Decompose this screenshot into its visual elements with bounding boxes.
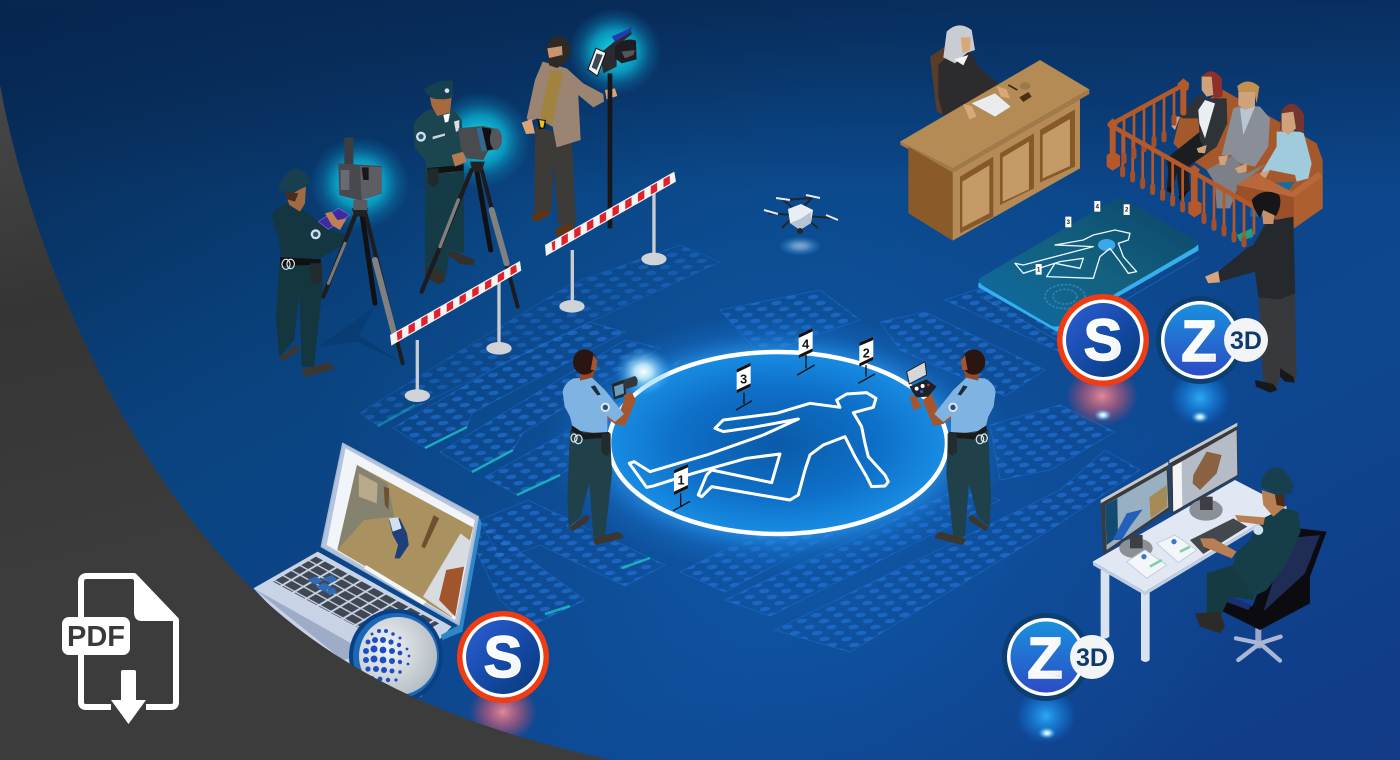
- left monitor: [1101, 462, 1170, 558]
- icon: camera: [612, 376, 638, 407]
- officer with camera: [563, 348, 672, 545]
- legs: [276, 258, 323, 367]
- jury box: [1107, 71, 1323, 245]
- Z3D badge bottom: [1002, 613, 1114, 701]
- evidence marker 3: [736, 363, 752, 410]
- torso: [272, 203, 347, 262]
- man in grey: [1207, 81, 1270, 208]
- officer with tablet and tripod scanner: [272, 137, 410, 377]
- bench armrest: [1237, 172, 1323, 197]
- woman in blue: [1250, 104, 1312, 217]
- S badge bottom left: [457, 611, 549, 703]
- S badge right: S: [1084, 308, 1122, 373]
- tablet with 3D scene: [978, 198, 1199, 340]
- evidence marker 4: [797, 328, 815, 375]
- head: [547, 36, 571, 63]
- screen: [441, 517, 482, 640]
- floor circuit pattern: [360, 245, 1140, 652]
- evidence marker 1: [673, 464, 690, 511]
- small markers: 2: [1125, 208, 1129, 214]
- Z3D badge right: Z: [1181, 309, 1217, 374]
- chalk body outline: [629, 393, 888, 500]
- chair: [1214, 527, 1327, 661]
- Z3D badge bottom: 3D: [1076, 644, 1108, 672]
- small markers: [1036, 201, 1130, 275]
- Z3D badge bottom: Z: [1027, 626, 1063, 691]
- judge bench: [900, 25, 1089, 241]
- keyboard: [1190, 518, 1247, 554]
- detective with handheld scanner pole: [522, 8, 662, 237]
- trousers: [534, 127, 576, 225]
- crime scene circle: [543, 313, 1013, 573]
- evidence marker 1: 1: [677, 474, 685, 488]
- jacket: [527, 62, 604, 147]
- light beam Z badge bottom: [1016, 688, 1076, 744]
- dark corner wedge: [0, 85, 612, 760]
- S badge right: [1057, 294, 1149, 386]
- evidence marker 3: 3: [740, 372, 747, 386]
- globe badge: [349, 609, 443, 703]
- barrier tape front: [390, 261, 521, 402]
- evidence marker 2: 2: [863, 346, 870, 360]
- judge: [930, 25, 998, 117]
- small markers: 1: [1037, 267, 1041, 273]
- papers: [1127, 535, 1197, 578]
- railing: [1110, 83, 1257, 245]
- light beam Z badge right: [1170, 370, 1230, 426]
- tripod: [323, 212, 403, 363]
- small markers: 3: [1067, 220, 1071, 226]
- pole and scanner: [603, 73, 617, 228]
- S badge bottom left: S: [484, 625, 522, 690]
- right monitor: [1169, 423, 1238, 521]
- drone: [764, 195, 838, 256]
- officer with controller: [907, 349, 996, 545]
- tripod: [422, 170, 518, 307]
- officer with laser scanner on tripod: [413, 81, 532, 307]
- seated officer: [1195, 467, 1301, 633]
- Z3D badge right: 3D: [1230, 327, 1262, 355]
- evidence marker 4: 4: [802, 338, 809, 352]
- light beam under S badge bottom left: [469, 682, 537, 742]
- PDF download icon: PDF: [67, 621, 125, 653]
- Z3D badge right: [1156, 296, 1268, 384]
- PDF download icon: [62, 576, 178, 724]
- woman in black: [1167, 71, 1227, 202]
- icon: scanner case: [907, 362, 937, 411]
- presenter in black: [1205, 192, 1297, 393]
- scanner: [344, 137, 353, 165]
- laptop: [253, 443, 482, 697]
- small markers: 4: [1096, 204, 1100, 210]
- light beam S badge right: [1066, 366, 1138, 426]
- workstation desk: [1093, 423, 1327, 662]
- victim: [389, 518, 409, 558]
- barrier tape back: [545, 172, 676, 313]
- icon: gavel: [1008, 82, 1032, 102]
- tablet: [318, 208, 350, 229]
- evidence marker 2: [858, 337, 875, 383]
- scanner: [458, 126, 502, 160]
